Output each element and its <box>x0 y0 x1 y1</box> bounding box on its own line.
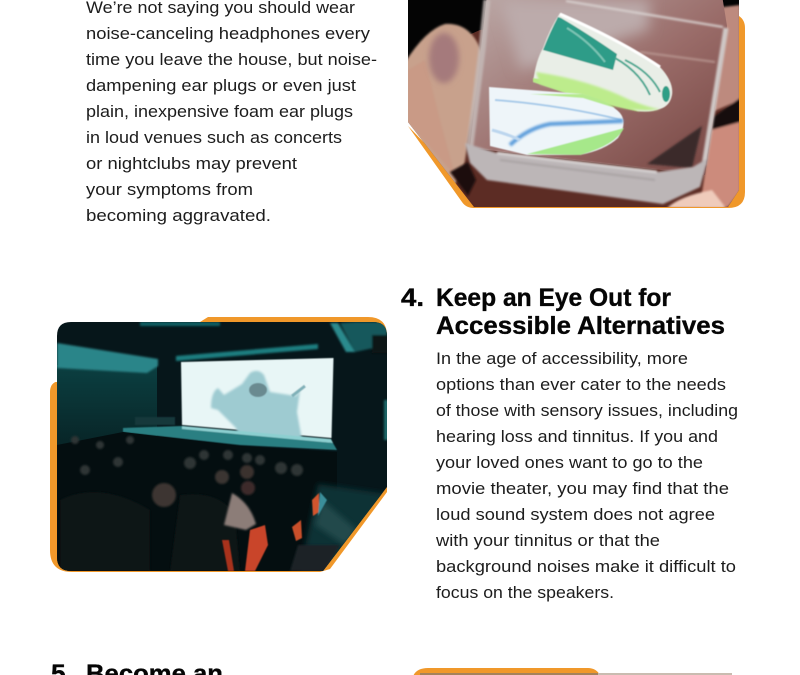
stage <box>123 417 337 450</box>
body text: step 3 <box>86 0 377 225</box>
body text: step 3: becoming aggravated. <box>86 206 271 225</box>
body text: step 4: movie theater, you may find that the <box>436 479 729 498</box>
body text: step 4: hearing loss and tinnitus. If you and <box>436 427 718 446</box>
body text: step 4: focus on the speakers. <box>436 583 614 602</box>
body text: step 4: loud sound system does not agree <box>436 505 715 524</box>
body text: step 4: with your tinnitus or that the <box>435 531 660 550</box>
body text: step 4: of those with sensory issues, including <box>436 401 738 420</box>
body text: step 3: in loud venues such as concerts <box>86 128 342 147</box>
body text: step 3: your symptoms from <box>86 180 253 199</box>
photo: movie theater audience and screen <box>50 317 388 572</box>
heading: step 4 <box>401 284 725 340</box>
clear case interior <box>470 0 727 175</box>
red theater seats <box>222 492 327 571</box>
audience heads <box>60 436 303 571</box>
stairs and floor <box>300 484 387 571</box>
body text: step 3: noise-canceling headphones every <box>86 24 371 43</box>
body text: step 4: your loved ones want to go to the <box>436 453 703 472</box>
right fingers <box>714 4 739 112</box>
body text: step 3: dampening ear plugs or even just <box>86 76 356 95</box>
ear plug: blue swirl <box>489 87 624 155</box>
heading: step 4: 4. <box>401 284 424 312</box>
photo: step 5, cropped at page edge <box>412 668 732 675</box>
body text: step 3: time you leave the house, but noise- <box>86 50 377 69</box>
heading: step 4: Accessible Alternatives <box>436 312 725 340</box>
ear plug: green swirl <box>533 13 672 112</box>
body text: step 4: options than ever cater to the needs <box>436 375 726 394</box>
thumb <box>404 24 484 188</box>
clear case walls <box>465 0 726 204</box>
body text: step 4: In the age of accessibility, more <box>436 349 688 368</box>
cinema screen <box>181 358 333 440</box>
body text: step 4: background noises make it difficult to <box>436 557 736 576</box>
heading: step 4: Keep an Eye Out for <box>436 284 671 312</box>
body text: step 3: or nightclubs may prevent <box>86 154 297 173</box>
body text: step 3: plain, inexpensive foam ear plugs <box>86 102 353 121</box>
photo: foam ear plugs in a clear case <box>404 0 745 210</box>
body text: step 4 <box>435 349 738 602</box>
